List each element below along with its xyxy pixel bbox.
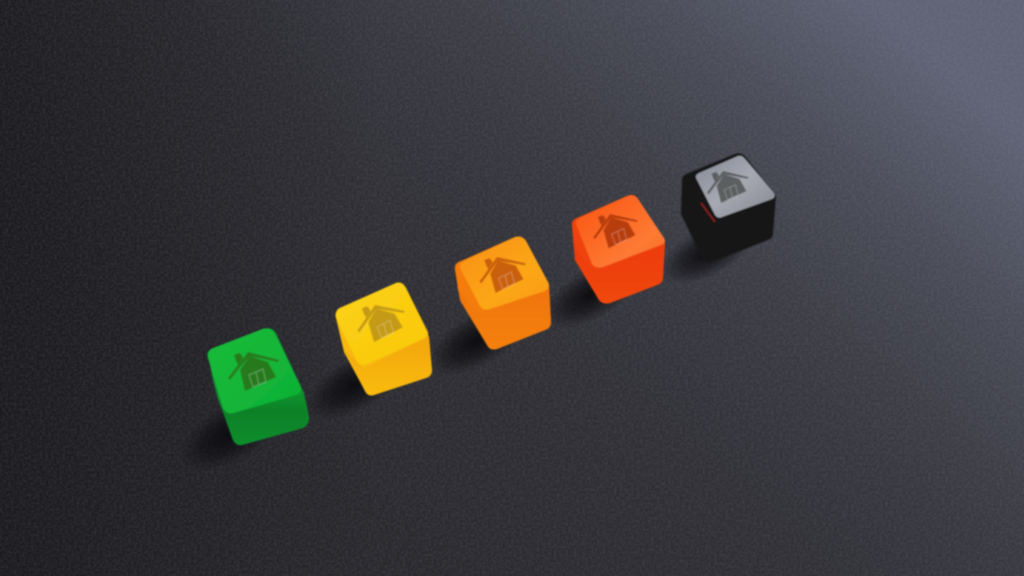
cube: green <box>208 328 309 445</box>
icon: house on green cube <box>228 352 279 391</box>
cube shadows <box>168 206 765 486</box>
cube: red <box>572 195 665 304</box>
icon: house on yellow cube <box>356 303 406 343</box>
icon: house on black cube <box>707 171 749 203</box>
cube: yellow <box>336 283 432 396</box>
icon: house on orange cube <box>479 256 527 294</box>
icon: house on red cube <box>592 213 638 249</box>
cube: black <box>681 153 776 262</box>
highlight: red reflection on black cube <box>701 203 715 222</box>
cube: orange <box>455 236 551 350</box>
